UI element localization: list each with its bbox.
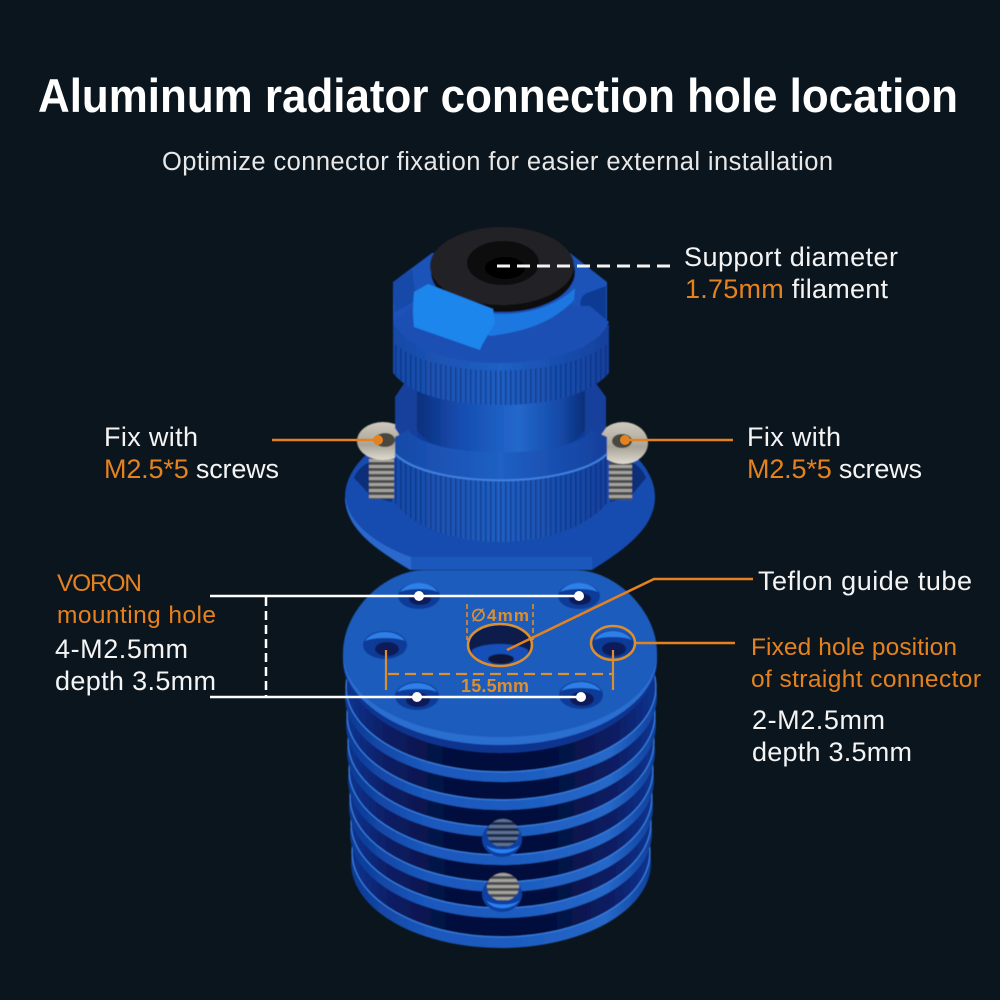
callout: left screw: M2.5*5 screws (104, 454, 279, 484)
callout: left screw (104, 422, 383, 484)
blue tab (413, 284, 495, 350)
upper standoffs (395, 382, 606, 442)
callout: right screw: Fix with (747, 422, 841, 452)
black washer (430, 227, 575, 312)
callout: VORON mounting holes: depth 3.5mm (55, 666, 216, 696)
base plate (345, 435, 655, 570)
callout: right screw (620, 422, 922, 484)
callout: filament: Support diameter (684, 242, 898, 272)
callout: straight connector hole: 2-M2.5mm (752, 705, 885, 735)
product: heatsink radiator (343, 570, 657, 948)
dimension: 15.5 mm spacing: 15.5mm (461, 676, 529, 696)
side threaded holes (482, 819, 522, 912)
callout: Teflon guide tube (468, 566, 972, 666)
product: connector (345, 227, 655, 570)
callout: filament: 1.75mm filament (685, 274, 888, 304)
upper knurled ring (393, 306, 609, 405)
top block (393, 253, 607, 330)
callout: Teflon guide tube: Teflon guide tube (758, 566, 972, 596)
title: Aluminum radiator connection hole location (38, 69, 958, 122)
callout: VORON mounting holes (55, 570, 586, 702)
lower knurled ring (395, 430, 607, 542)
dimension: 15.5 mm spacing (386, 650, 613, 696)
top plate rim (343, 653, 657, 753)
callout: straight connector hole: depth 3.5mm (752, 737, 912, 767)
base slot shadows (354, 458, 392, 502)
dimension: 4 mm bore: ∅4mm (471, 606, 529, 625)
callout: VORON mounting holes: VORON (57, 570, 142, 597)
callout: VORON mounting holes: mounting hole (57, 602, 216, 629)
callout: straight connector hole: Fixed hole position (751, 634, 957, 661)
top plate face (343, 570, 657, 737)
right screw (598, 422, 648, 500)
callout: filament (497, 242, 898, 304)
central hole (469, 625, 531, 665)
base plate flat edge (411, 557, 592, 570)
middle cylinder (417, 385, 585, 480)
callout: left screw: Fix with (104, 422, 198, 452)
callout: straight connector hole: of straight connector (751, 666, 981, 693)
callout: straight connector hole (591, 626, 981, 767)
heatsink fins (345, 602, 657, 948)
callout: VORON mounting holes: 4-M2.5mm (55, 634, 188, 664)
mounting holes (363, 583, 634, 710)
blue clip ring (430, 288, 575, 336)
left screw (357, 422, 409, 499)
dimension: 4 mm bore (467, 604, 533, 640)
callout: right screw: M2.5*5 screws (747, 454, 922, 484)
subtitle: Optimize connector fixation for easier external installation (162, 148, 833, 176)
